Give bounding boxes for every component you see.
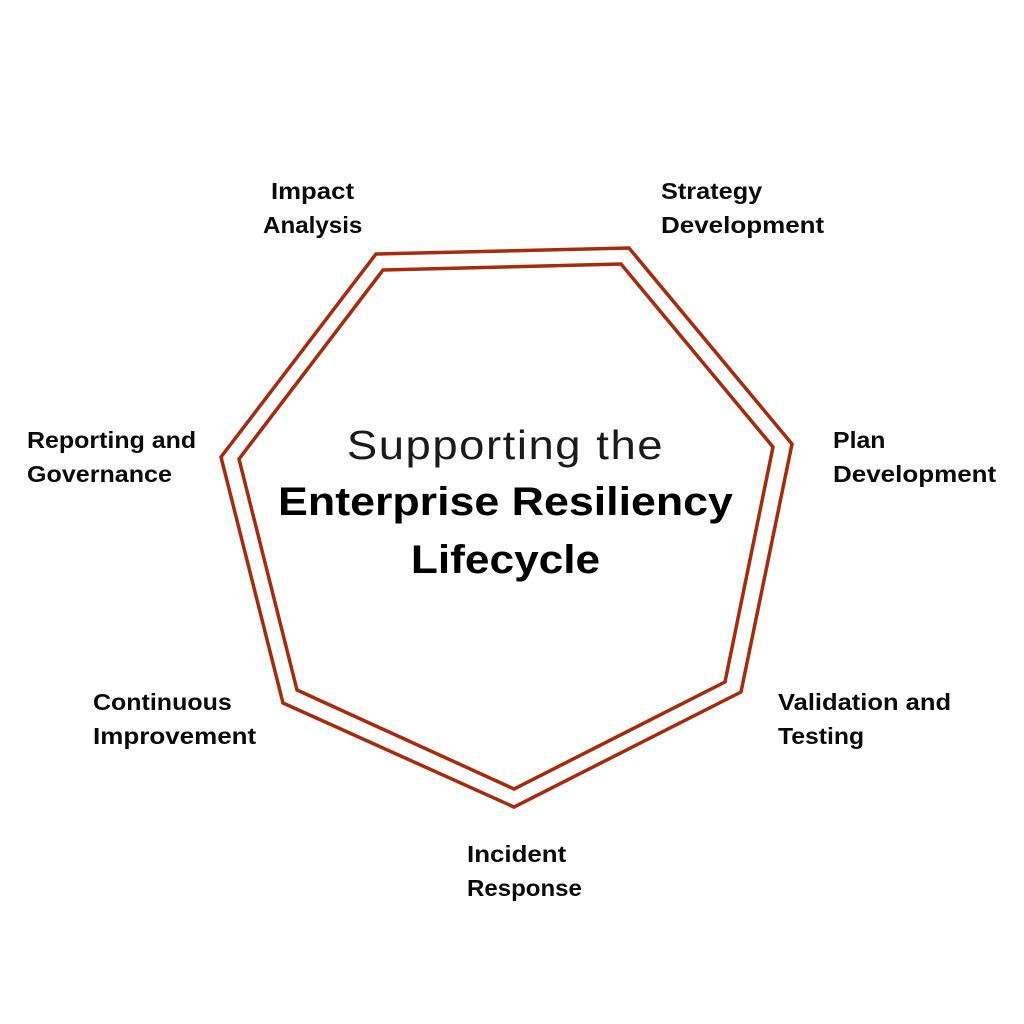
label: Strategy Development xyxy=(661,178,824,238)
label: Strategy Development: Development xyxy=(661,212,824,238)
label: Incident Response: Incident xyxy=(467,841,566,867)
label: Plan Development xyxy=(833,427,996,487)
label: Continuous Improvement xyxy=(93,689,256,749)
label: Impact Analysis: Analysis xyxy=(263,212,362,238)
label: Reporting and Governance: Governance xyxy=(27,461,172,487)
label: Reporting and Governance: Reporting and xyxy=(27,427,196,453)
label: Incident Response xyxy=(467,841,582,901)
title: Enterprise Resiliency xyxy=(278,480,733,524)
label: Validation and Testing: Validation and xyxy=(778,689,951,715)
label: Incident Response: Response xyxy=(467,875,582,901)
label: Impact Analysis xyxy=(263,178,362,238)
title: Lifecycle xyxy=(411,538,600,582)
label: Plan Development: Plan xyxy=(833,427,885,453)
label: Plan Development: Development xyxy=(833,461,996,487)
title xyxy=(278,422,733,582)
label: Strategy Development: Strategy xyxy=(661,178,762,204)
label: Reporting and Governance xyxy=(27,427,196,487)
label: Validation and Testing: Testing xyxy=(778,723,864,749)
title: Supporting the xyxy=(347,422,664,468)
label: Continuous Improvement: Continuous xyxy=(93,689,232,715)
label: Validation and Testing xyxy=(778,689,951,749)
label: Continuous Improvement: Improvement xyxy=(93,723,256,749)
label: Impact Analysis: Impact xyxy=(271,178,354,204)
